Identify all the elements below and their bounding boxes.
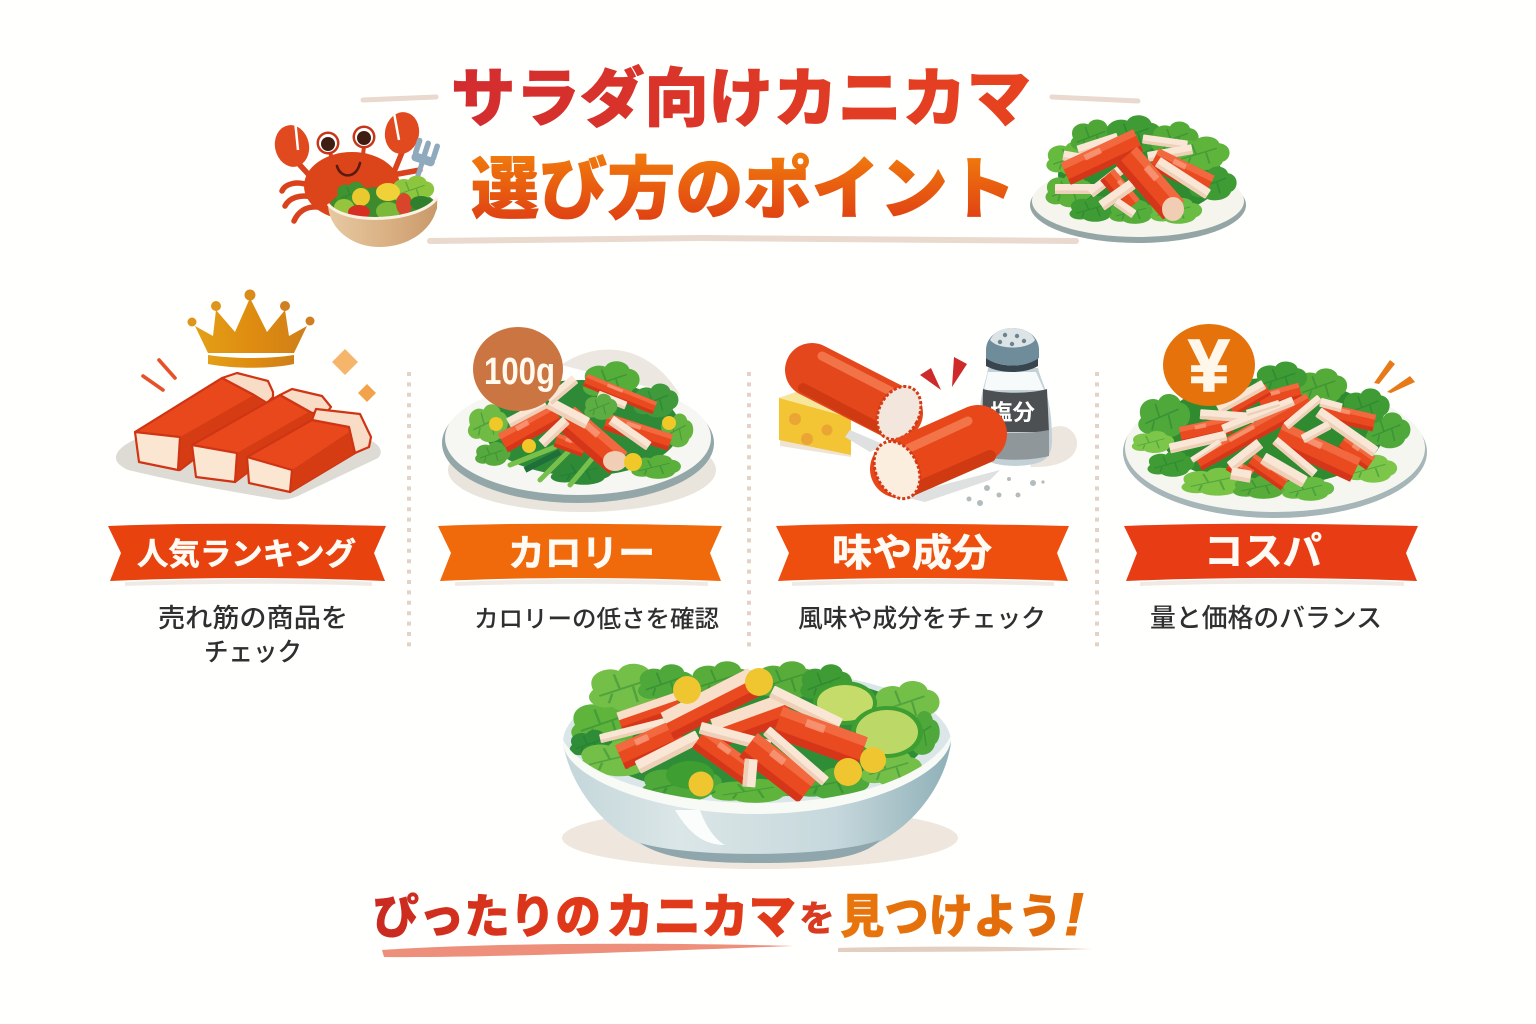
yen badge bbox=[1163, 324, 1255, 407]
title line 2: 選び方のポイント bbox=[471, 152, 1016, 228]
crab sticks bbox=[1055, 129, 1215, 221]
banner label: 人気ランキング bbox=[137, 537, 356, 572]
description: 量と価格のバランス bbox=[1150, 603, 1382, 633]
closing message bbox=[373, 881, 1092, 957]
description: 風味や成分をチェック bbox=[798, 605, 1046, 633]
crab claws bbox=[271, 109, 422, 170]
upper roll bbox=[803, 356, 896, 431]
panel: calories bbox=[438, 327, 722, 633]
roll shadows bbox=[845, 430, 1000, 502]
fork bbox=[404, 137, 441, 187]
corn bbox=[673, 668, 886, 796]
icon: crab stick plate bbox=[1030, 115, 1246, 243]
panel: flavor and ingredients bbox=[776, 328, 1077, 633]
sparkles bbox=[143, 349, 376, 402]
closing: brush underlines bbox=[382, 944, 1092, 957]
bowl shadow bbox=[562, 807, 958, 869]
header bbox=[271, 63, 1246, 247]
illustration: crab stick salad bowl bbox=[562, 661, 958, 869]
bowl rim bbox=[563, 735, 951, 814]
100g badge bbox=[473, 327, 563, 411]
closing: exclamation: ! bbox=[1064, 881, 1084, 948]
bowl rim back bbox=[563, 670, 951, 814]
description: カロリーの低さを確認 bbox=[474, 606, 719, 633]
banner bbox=[1124, 524, 1418, 586]
icon: shredded salad plate with yen badge bbox=[1123, 324, 1427, 518]
icon: crab sticks bbox=[135, 373, 371, 492]
banner label: コスパ bbox=[1204, 531, 1322, 574]
100g badge: 100g bbox=[484, 351, 555, 393]
bowl base bbox=[640, 840, 880, 863]
icon: crown bbox=[188, 290, 314, 368]
parsley leaf bbox=[584, 394, 617, 420]
icon: crab stick rolls bbox=[803, 356, 1000, 506]
shadow bbox=[116, 434, 381, 500]
title decorative lines bbox=[363, 97, 1138, 241]
description: チェック bbox=[204, 637, 302, 667]
icon: crab with salad bowl bbox=[271, 109, 441, 247]
icon: salt shaker bbox=[979, 328, 1077, 467]
closing: particle: を bbox=[799, 898, 835, 939]
crab eyes bbox=[316, 126, 376, 158]
banner label: カロリー bbox=[508, 533, 655, 574]
panel: popularity ranking bbox=[108, 290, 386, 667]
salad in bowl bbox=[329, 176, 437, 227]
lettuce bbox=[468, 361, 693, 485]
corn bbox=[489, 416, 676, 471]
crab sticks bbox=[599, 668, 868, 803]
closing: call to action: 見つけよう bbox=[840, 890, 1062, 943]
wooden bowl bbox=[328, 198, 437, 247]
panel: value for money bbox=[1123, 324, 1427, 633]
lettuce bbox=[1046, 115, 1237, 224]
crab smile bbox=[337, 163, 360, 175]
yen badge: ¥ bbox=[1188, 324, 1230, 407]
icon: salad plate with 100g badge bbox=[442, 327, 716, 512]
salt label: 塩分 bbox=[990, 400, 1035, 425]
banner label: 味や成分 bbox=[832, 533, 992, 575]
bowl highlight bbox=[675, 810, 725, 845]
dotted column dividers bbox=[409, 372, 1097, 650]
crab body bbox=[304, 152, 400, 220]
lettuce bbox=[1132, 361, 1410, 501]
salt grains bbox=[966, 477, 1045, 506]
description bbox=[158, 603, 348, 667]
crab sticks bbox=[498, 374, 673, 474]
cucumber slices bbox=[666, 681, 923, 789]
icon: cheese bbox=[779, 385, 851, 457]
closing: product name: カニカマ bbox=[606, 891, 796, 944]
closing message: ぴったりの bbox=[373, 890, 601, 943]
crab legs bbox=[282, 150, 420, 221]
title line 1: サラダ向けカニカマ bbox=[451, 63, 1031, 135]
bowl body bbox=[563, 742, 951, 862]
banner bbox=[438, 524, 722, 586]
description: 売れ筋の商品を bbox=[158, 603, 348, 633]
accent ticks bbox=[920, 357, 967, 390]
banner bbox=[108, 524, 386, 586]
accent ticks bbox=[1374, 360, 1415, 393]
banner bbox=[776, 524, 1069, 586]
crab sticks bbox=[1169, 380, 1379, 490]
lettuce bbox=[570, 661, 940, 803]
lower roll bbox=[899, 421, 990, 490]
